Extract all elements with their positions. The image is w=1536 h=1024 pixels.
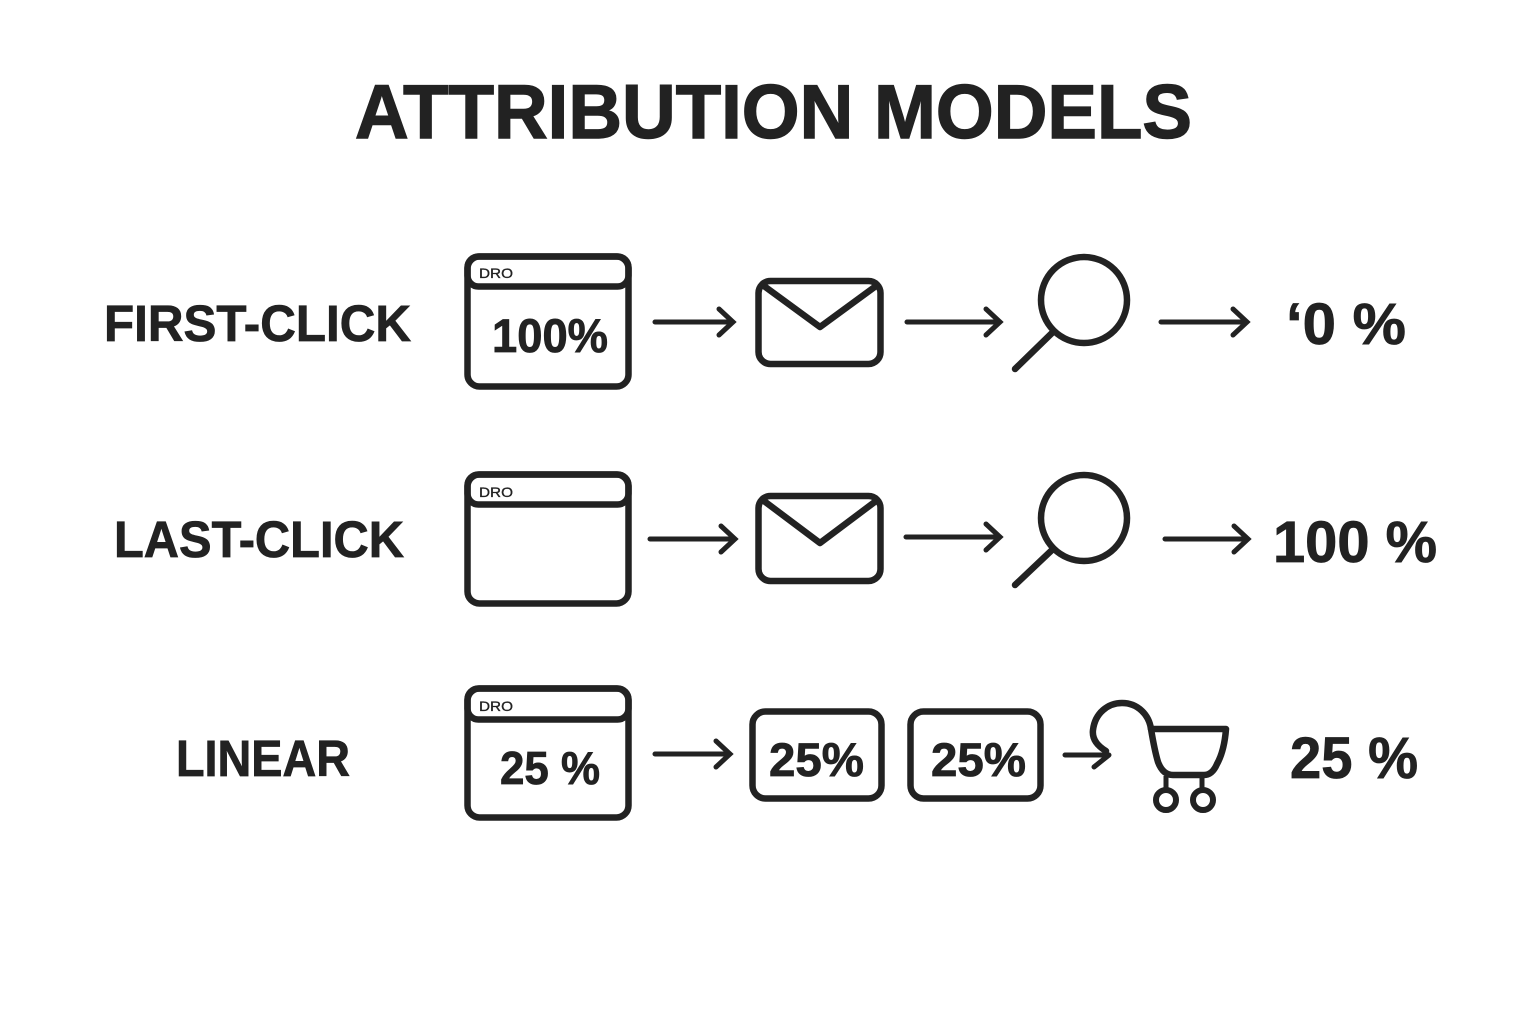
box: 25%: 25% bbox=[931, 733, 1026, 786]
arrow bbox=[650, 526, 735, 552]
icon: shopping cart bbox=[1151, 729, 1226, 810]
box: 25% bbox=[910, 712, 1040, 798]
row: linear bbox=[176, 688, 1418, 818]
arrow bbox=[907, 309, 1000, 335]
icon: empty browser window bbox=[468, 474, 628, 604]
arrow bbox=[1165, 526, 1248, 552]
icon: magnifier bbox=[1015, 475, 1127, 585]
row: first-click bbox=[104, 256, 1406, 386]
label: linear: LINEAR bbox=[176, 730, 350, 787]
row: last-click bbox=[114, 474, 1437, 604]
icon: browser window 100%: 100% bbox=[492, 309, 608, 362]
icon: browser window 25% bbox=[468, 688, 628, 818]
icon: browser window 25%: 25 % bbox=[500, 742, 600, 794]
label: last-click: LAST-CLICK bbox=[114, 511, 404, 568]
icon: empty browser window: DRO bbox=[479, 484, 513, 500]
title: ATTRIBUTION MODELS bbox=[355, 70, 1192, 155]
icon: envelope bbox=[758, 281, 880, 364]
arrow bbox=[655, 741, 730, 767]
arrow bbox=[1161, 309, 1247, 335]
arrow bbox=[906, 524, 1000, 550]
icon: magnifier bbox=[1015, 257, 1127, 369]
box: 25%: 25% bbox=[769, 733, 864, 786]
result: 25%: 25 % bbox=[1290, 726, 1418, 791]
label: first-click: FIRST-CLICK bbox=[104, 295, 411, 352]
box: 25% bbox=[752, 712, 882, 798]
icon: browser window 100%: DRO bbox=[479, 265, 513, 281]
icon: envelope bbox=[758, 496, 880, 581]
arrow into cart bbox=[1065, 703, 1151, 767]
icon: browser window 100% bbox=[468, 256, 628, 386]
icon: browser window 25%: DRO bbox=[479, 698, 513, 714]
result: 100%: 100 % bbox=[1273, 510, 1437, 575]
result: 0%: ‘0 % bbox=[1286, 292, 1406, 357]
arrow bbox=[655, 309, 733, 335]
